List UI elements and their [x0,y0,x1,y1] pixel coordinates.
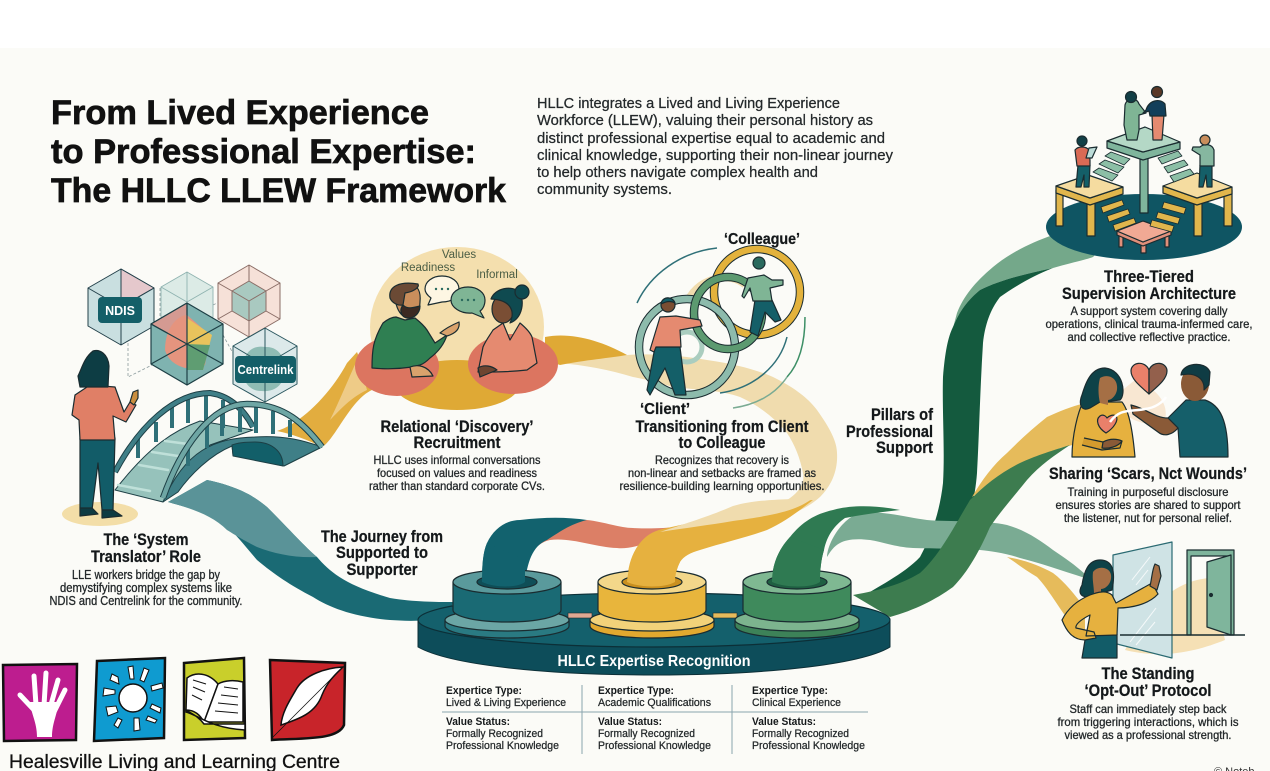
body: transitioning [620,453,824,493]
connector bars between cylinders [568,613,737,618]
column: clinical: Formally Recognized [752,728,849,740]
heading and text: transitioning: to Colleague [678,434,766,452]
man with beard [372,283,459,377]
column: clinical: Expertice Type: [752,685,828,697]
body: transitioning: non-linear and setbacks are framed as [628,466,816,480]
heading and text: discovery: Recruitment [414,434,501,452]
speech bubbles [425,276,485,318]
body: scars [1056,485,1241,525]
heading and text: opt-out: The Standing [1102,664,1194,683]
title: From Lived Experience [51,94,429,132]
dashed guide lines [128,288,245,377]
column: lived experience: Lived & Living Experience [446,697,566,709]
tier: central pillar and top platform [1107,127,1180,213]
body: opt-out: from triggering interactions, which is [1058,715,1238,729]
tier: right table [1163,173,1232,236]
logo: red feather [270,660,345,740]
title [51,94,506,210]
intro paragraph: to help others navigate complex health and [537,164,818,181]
woman with raised hand [1062,560,1161,658]
woman in yellow [1072,368,1135,457]
body: discovery: rather than standard corporate CVs. [369,479,545,493]
heading and text: system translator: Translator’ Role [91,547,201,566]
illustration: person at bridge [62,351,138,526]
body: opt-out [1058,702,1238,742]
heading and text: opt-out [1058,664,1238,742]
heading and text: three-tiered: Supervision Architecture [1062,285,1236,303]
cube: NDIS: NDIS [105,304,135,318]
ribbon: green pillar arc [772,506,900,582]
intro paragraph: Workforce (LLEW), valuing their personal history as [537,112,873,129]
intro paragraph: HLLC integrates a Lived and Living Experience [537,95,840,112]
tier: salmon base table [1117,221,1171,253]
heading and text: discovery [369,418,545,493]
heading: journey: The Journey from [321,528,443,546]
column: lived experience: Formally Recognized [446,728,543,740]
ribbon: salmon connector [520,520,677,560]
body: discovery [369,453,545,493]
body: system translator [50,568,242,608]
ribbon: teal pillar arc [482,518,587,582]
ring: gold [714,249,800,335]
title: The HLLC LLEW Framework [51,172,506,210]
illustration: system cubes [88,265,297,402]
stairs [1093,151,1194,232]
door [1120,550,1245,635]
logo: magenta hand [3,664,77,741]
heading and text: discovery: Relational ‘Discovery’ [380,418,534,436]
heading and text: system translator: The ‘System [104,530,188,549]
body: system translator: NDIS and Centrelink for the community. [50,594,242,608]
ring: green [694,277,762,349]
figure: client [647,298,702,395]
ribbon: gold path from bridge to discovery [277,352,372,447]
body: three-tiered: operations, clinical trauma-infermed care, [1046,317,1252,331]
ribbon: gold to sharing scars [972,403,1085,497]
illustration: conversation scene [355,247,558,410]
platform: HLLC Expertise Recognition [418,593,890,675]
illustration: rings with client and colleague figures [637,248,805,408]
body: discovery: focused on values and readiness [377,466,537,480]
label: values: Values [442,249,476,261]
figures: handshake on top [1124,86,1166,140]
heading and text: transitioning [620,418,824,493]
heading and text: scars [1049,464,1247,525]
cube: centre prism [151,303,223,385]
swirl [1110,397,1166,422]
figure: colleague [742,257,783,336]
column: academic: Academic Qualifications [598,697,711,709]
body: three-tiered [1046,304,1252,344]
body: scars: the listener, nut for personal relief. [1064,511,1232,525]
cube: back [161,272,213,332]
heading: journey: Supported to [336,544,428,562]
column: lived experience: Professional Knowledge [446,740,559,752]
body: discovery: HLLC uses informal conversations [374,453,540,467]
ribbon: teal journey path from bridge to platform [168,480,453,621]
label: readiness: Readiness [401,262,455,274]
tier: left table [1056,175,1123,236]
body: three-tiered: and collective reflective practice. [1068,330,1230,344]
ring: teal [639,299,735,395]
heading: pillars: Professional [846,423,933,441]
illustration: opt-out door and mirror [1062,542,1245,658]
column: lived experience: Value Status: [446,716,510,728]
body: system translator: demystifying complex systems like [60,581,232,595]
cube: Centrelink: Centrelink [238,363,294,377]
column: lived experience [446,685,566,752]
body: scars: ensures stories are shared to support [1056,498,1241,512]
figure: left with clipboard [1075,136,1097,187]
column: academic: Formally Recognized [598,728,695,740]
big heart [1131,363,1167,394]
ribbon: tan path from discovery through client to colleague to platform [545,336,837,558]
heading and text: opt-out: ‘Opt-Out’ Protocol [1084,681,1212,700]
glass panel [1113,542,1172,658]
illustration: bridge [115,393,322,502]
expertise table [442,685,868,754]
illustration: three-tier supervision [1046,86,1242,260]
body: transitioning: resilience-building learning opportunities. [620,479,824,493]
heading and text: three-tiered: Three-Tiered [1104,268,1194,286]
column: academic: Professional Knowledge [598,740,711,752]
cylinder: green clinical [735,537,859,638]
column: clinical [752,685,865,752]
body: three-tiered: A support system covering dally [1070,304,1228,318]
label: client: ‘Client’ [640,401,690,418]
heading: journey: Supporter [346,561,418,579]
heading: pillars: Support [876,439,933,457]
column: academic: Expertice Type: [598,685,674,697]
cylinder: teal lived experience [445,543,569,638]
heading and text: transitioning: Transitioning from Client [636,418,809,436]
ribbon: medium green to sharing scars [853,445,1070,617]
ribbon: light green band to opt-out [827,512,1085,640]
heading: journey [321,528,443,579]
column: clinical: Value Status: [752,716,816,728]
column: lived experience: Expertice Type: [446,685,522,697]
woman with bun [478,285,537,377]
intro paragraph [537,95,893,198]
heading and text: three-tiered [1046,268,1252,344]
body: system translator: LLE workers bridge the gap by [72,568,221,582]
logo: blue sun [94,658,165,741]
heading and text: system translator [50,530,242,608]
label: informal: Informal [476,269,518,281]
intro paragraph: clinical knowledge, supporting their non-linear journey [537,147,893,164]
ribbon: gold pillar arc [627,498,813,582]
body: transitioning: Recognizes that recovery is [655,453,789,467]
cylinder: gold academic [590,543,714,638]
intro paragraph: distinct professional expertise equal to academic and [537,130,885,147]
logo: yellow book [184,658,245,740]
title: to Professional Expertise: [51,133,476,171]
heading: pillars: Pillars of [871,406,933,424]
illustration: sharing scars [1072,363,1228,457]
platform label: HLLC Expertise Recognition [558,653,750,670]
figure: right standing [1192,135,1214,187]
ribbon: dark green pillar rising to supervision [870,235,1110,592]
body: scars: Training in purposeful disclosure [1068,485,1229,499]
column: academic: Value Status: [598,716,662,728]
cube: NDIS [88,269,154,345]
body: opt-out: Staff can immediately step back [1070,702,1227,716]
column: academic [598,685,711,752]
heading: pillars [846,406,933,457]
label: colleague: ‘Colleague’ [724,231,800,248]
cube: Centrelink [233,328,297,402]
intro paragraph: community systems. [537,181,672,198]
column: clinical: Professional Knowledge [752,740,865,752]
cube: pink with inner teal [218,265,280,337]
column: clinical: Clinical Experience [752,697,841,709]
body: opt-out: viewed as a professional strength. [1064,728,1232,742]
man in teal [1131,364,1228,457]
